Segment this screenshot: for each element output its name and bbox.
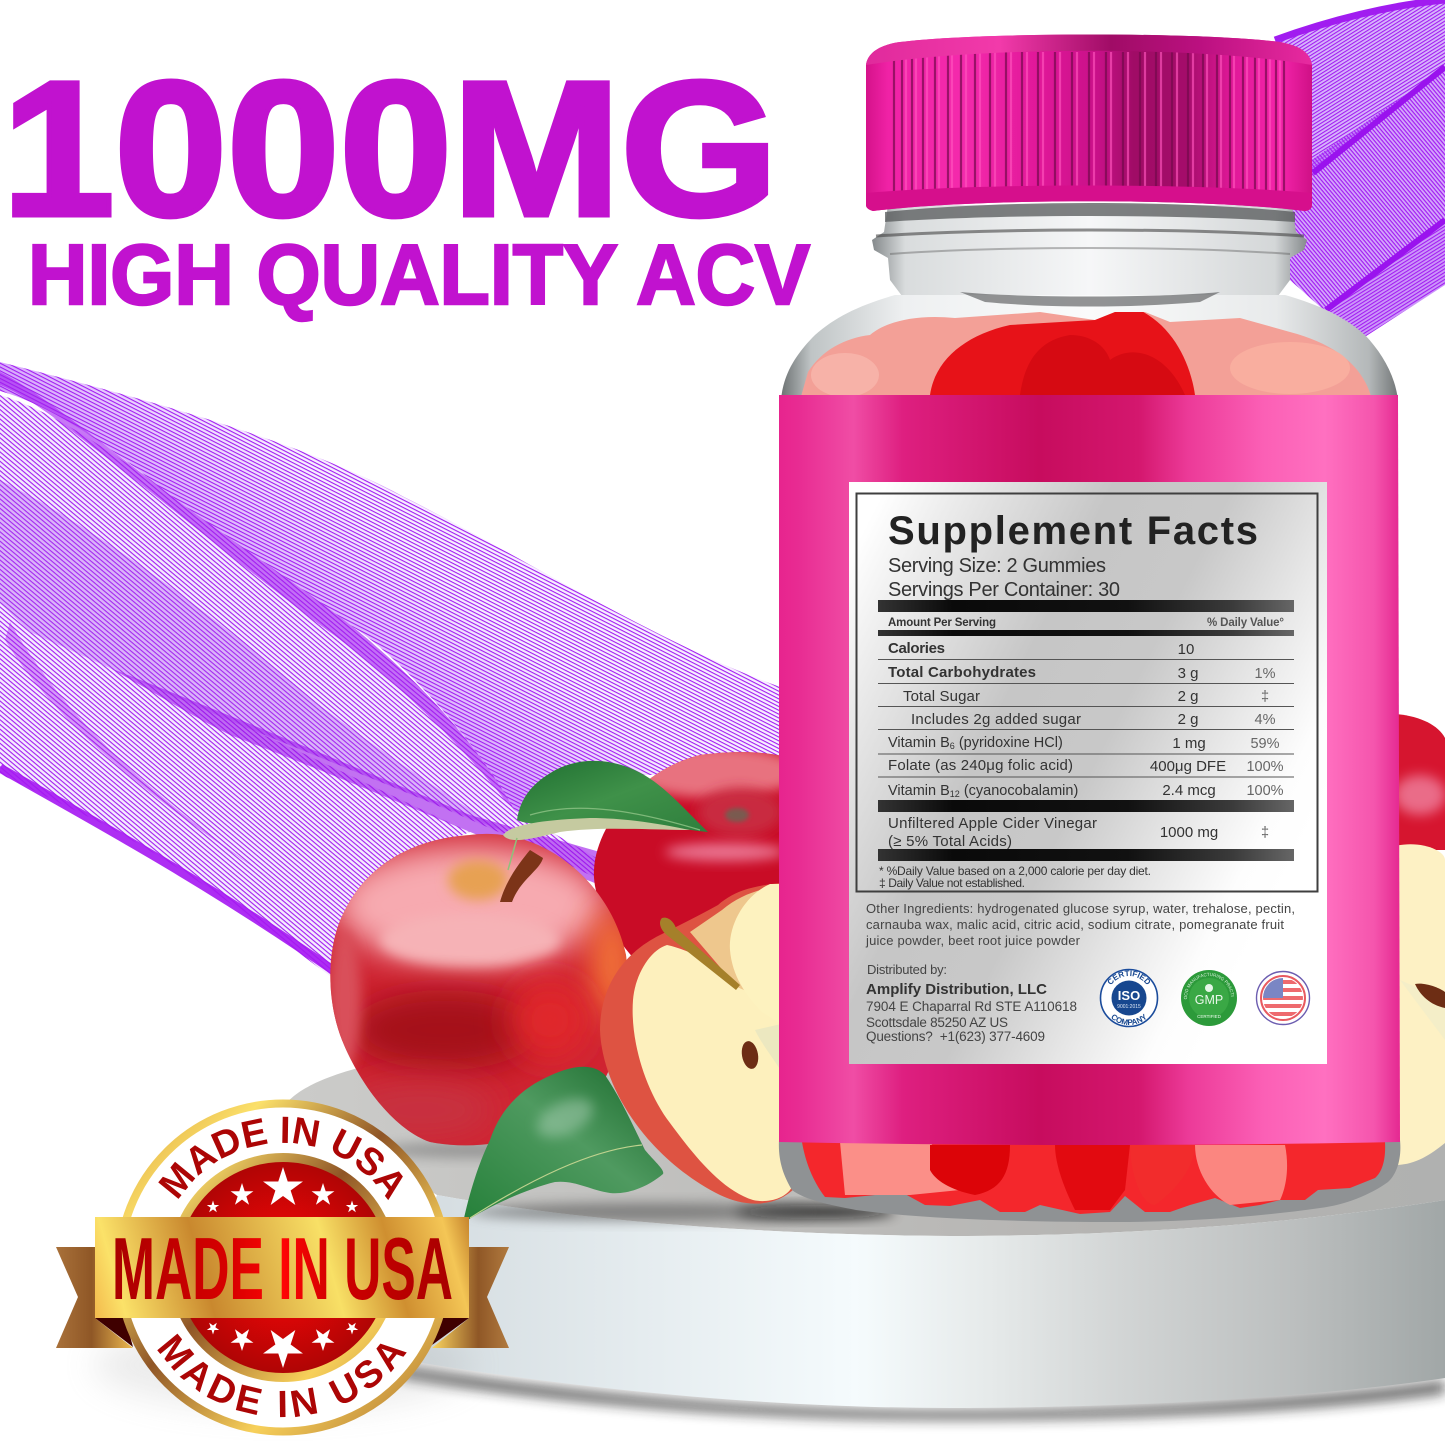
distributor info: Scottsdale 85250 AZ US: [866, 1015, 1008, 1030]
bottle: [779, 34, 1400, 1222]
nutrient names: Unfiltered Apple Cider Vinegar: [888, 815, 1097, 832]
icon: GMP badge: CERTIFIED: [1197, 1014, 1222, 1019]
icon: USA flag badge: [1256, 972, 1310, 1024]
bottle neck: [872, 205, 1307, 296]
other ingredients: [865, 901, 1295, 948]
daily values: 100%: [1246, 783, 1284, 799]
icon: ISO badge: [1100, 968, 1158, 1028]
icon: ISO badge: COMPANY: [1112, 1014, 1146, 1026]
nutrient names: (pyridoxine HCl): [955, 735, 1063, 751]
seal inner disc: [173, 1158, 393, 1378]
platform side: [400, 1195, 1445, 1408]
cap base rim: [866, 186, 1312, 211]
footnotes: [879, 864, 1151, 890]
apple stem: [500, 850, 543, 902]
nutrient names: Vitamin B: [888, 735, 950, 751]
cap top rim: [866, 34, 1312, 65]
nutrient names: Includes 2g added sugar: [911, 711, 1081, 728]
bottle label: [779, 395, 1400, 1145]
distributor info: Questions? +1(623) 377-4609: [866, 1029, 1045, 1044]
footnotes: ‡ Daily Value not established.: [879, 876, 1025, 890]
facts heading: Supplement Facts: [888, 509, 1258, 553]
other ingredients: juice powder, beet root juice powder: [865, 933, 1081, 948]
distributor info: [866, 962, 1077, 1044]
title: 1000MG: 1000MG: [2, 41, 778, 256]
amounts: [1150, 641, 1226, 841]
nutrient names: 12: [950, 789, 960, 799]
object shadows: [380, 1142, 895, 1221]
nutrient names: [888, 640, 1097, 850]
purple wave: top right: [1250, 0, 1445, 340]
apple flesh: [633, 945, 792, 1201]
icon: GMP badge: GOOD MANUFACTURING PRACTICE: [1184, 972, 1234, 1000]
apple skin interior: [690, 886, 785, 1030]
daily values: ‡: [1261, 825, 1269, 841]
ribbon text: MADE IN USA: [112, 1219, 453, 1318]
daily values: 100%: [1246, 759, 1284, 775]
daily values: ‡: [1261, 689, 1269, 705]
amounts: 1000 mg: [1160, 824, 1218, 841]
nutrient names: Total Carbohydrates: [888, 664, 1036, 681]
bottle shoulders: [781, 295, 1398, 400]
table rules: [878, 660, 1294, 777]
serving info: [888, 555, 1120, 601]
daily values: 1%: [1255, 666, 1276, 682]
nutrient names: Vitamin B: [888, 783, 950, 799]
icon: ISO badge: ISO: [1118, 988, 1140, 1003]
platform top surface: [285, 1065, 1445, 1236]
amounts: 2.4 mcg: [1162, 782, 1216, 799]
daily values: 4%: [1255, 712, 1276, 728]
gummies top: [802, 312, 1370, 395]
amounts: 3 g: [1178, 665, 1198, 682]
distributor info: 7904 E Chaparral Rd STE A110618: [866, 999, 1077, 1014]
nutrient names: Calories: [888, 640, 945, 657]
cap ridges: [894, 52, 1284, 192]
icon: large red apple: [329, 834, 632, 1145]
seal outer ring: [119, 1104, 447, 1432]
icon: ISO badge: CERTIFIED: [1108, 970, 1150, 984]
amounts: 400μg DFE: [1150, 758, 1226, 775]
facts box border: [856, 494, 1318, 892]
badge: made in USA seal: [56, 1100, 509, 1436]
serving info: Serving Size: 2 Gummies: [888, 555, 1106, 577]
supplement facts panel: [849, 482, 1327, 1064]
nutrient names: 6: [950, 741, 955, 751]
amounts: 1 mg: [1172, 735, 1206, 752]
column headers: [888, 617, 1284, 629]
distributor info: Distributed by:: [867, 962, 947, 977]
daily values: 59%: [1250, 736, 1280, 752]
seal stars: [207, 1167, 358, 1368]
nutrient names: Total Sugar: [903, 688, 980, 705]
bottle cap: [866, 34, 1312, 211]
daily values: [1246, 666, 1284, 841]
purple wave: left: [0, 362, 780, 978]
footnotes: * %Daily Value based on a 2,000 calorie per day diet.: [879, 864, 1151, 878]
other ingredients: Other Ingredients: hydrogenated glucose syrup, water, trehalose, pectin,: [866, 901, 1295, 916]
nutrient names: Folate (as 240μg folic acid): [888, 757, 1073, 774]
icon: apple leaf top: [503, 761, 708, 870]
platform: [285, 1065, 1445, 1420]
other ingredients: carnauba wax, malic acid, citric acid, sodium citrate, pomegranate fruit: [866, 917, 1284, 932]
amounts: 2 g: [1178, 711, 1198, 728]
column headers: % Daily Value°: [1207, 617, 1284, 629]
distributor info: Amplify Distribution, LLC: [866, 981, 1047, 998]
platform shadow: [400, 1365, 1445, 1420]
icon: GMP badge: GMP: [1195, 993, 1223, 1007]
apple stem and seed: [660, 918, 740, 990]
icon: half apple: [600, 882, 795, 1204]
nutrient names: (cyanocobalamin): [960, 783, 1078, 799]
nutrient names: (≥ 5% Total Acids): [888, 833, 1012, 850]
subtitle: high quality ACV: HIGH QUALITY ACV: [28, 228, 810, 323]
icon: apple leaf bottom: [463, 1067, 663, 1223]
ribbon tails: [56, 1247, 509, 1348]
icon: back apple: [594, 752, 779, 956]
amounts: 10: [1178, 641, 1194, 658]
gummies bottom and glass base: [779, 1140, 1400, 1222]
divider bars: [878, 600, 1294, 861]
icon: apples right of bottle: [1394, 714, 1445, 1165]
column headers: Amount Per Serving: [888, 617, 996, 629]
serving info: Servings Per Container: 30: [888, 579, 1120, 601]
seal curved text bottom: MADE IN USA: [157, 1334, 407, 1418]
icon: ISO badge: 9001:2015: [1117, 1004, 1141, 1010]
icon: GMP badge: [1181, 970, 1237, 1026]
amounts: 2 g: [1178, 688, 1198, 705]
seal curved text top: MADE IN USA: [158, 1116, 403, 1200]
ribbon banner: [95, 1217, 469, 1318]
apple flesh upper: [730, 884, 790, 1030]
